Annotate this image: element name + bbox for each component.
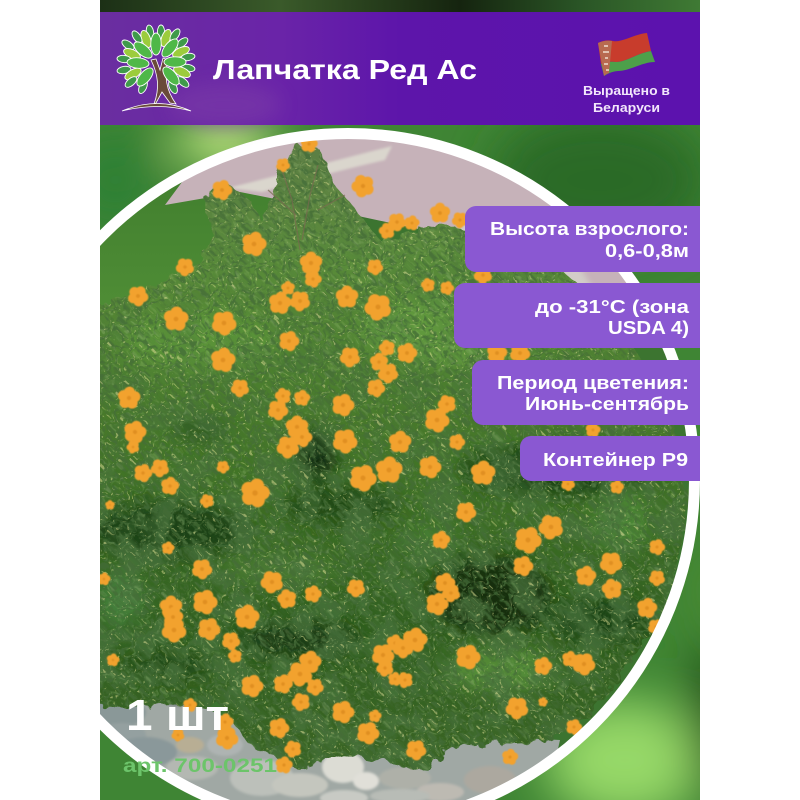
- panel: height: Высота взрослого:: [490, 219, 689, 239]
- photo: shrub foliage: [100, 142, 688, 771]
- photo: stones base: [133, 703, 560, 800]
- panel: height: [465, 206, 725, 272]
- panel: container: [520, 436, 720, 481]
- header band: [100, 12, 700, 127]
- panel: flowering period: Период цветения:: [497, 373, 689, 393]
- circular plant photo: [100, 139, 689, 800]
- photo: grass: [100, 182, 272, 306]
- white circular frame: [2, 134, 694, 800]
- icon: Belarus flag: [598, 33, 655, 76]
- panel: flowering period: Июнь-сентябрь: [525, 394, 689, 414]
- panel: height: 0,6-0,8м: [605, 241, 689, 261]
- photo: twigs on top of the shrub: [268, 165, 345, 250]
- made in Belarus label: Выращено в: [583, 84, 670, 98]
- icon: tree logo: [116, 24, 196, 111]
- made in Belarus label: Беларуси: [593, 101, 660, 115]
- panel: frost hardiness: до -31°С (зона: [535, 297, 690, 317]
- photo: orange flowers: [97, 134, 668, 774]
- photo: paved path: [165, 139, 626, 283]
- quantity label: 1 шт: [126, 691, 229, 740]
- photo: foliage texture: [100, 146, 688, 771]
- panel: container: Контейнер Р9: [543, 450, 688, 470]
- made in Belarus label: [583, 84, 670, 115]
- photo: stones: [100, 704, 514, 800]
- panel: flowering period: [472, 360, 722, 425]
- article number: арт. 700-0251: [123, 756, 278, 777]
- panel: frost hardiness: USDA 4): [608, 318, 689, 338]
- photo: backdrop: [210, 217, 689, 748]
- title: Лапчатка Ред Ас: [213, 54, 477, 85]
- panel: frost hardiness: [454, 283, 724, 348]
- product card: [100, 0, 700, 800]
